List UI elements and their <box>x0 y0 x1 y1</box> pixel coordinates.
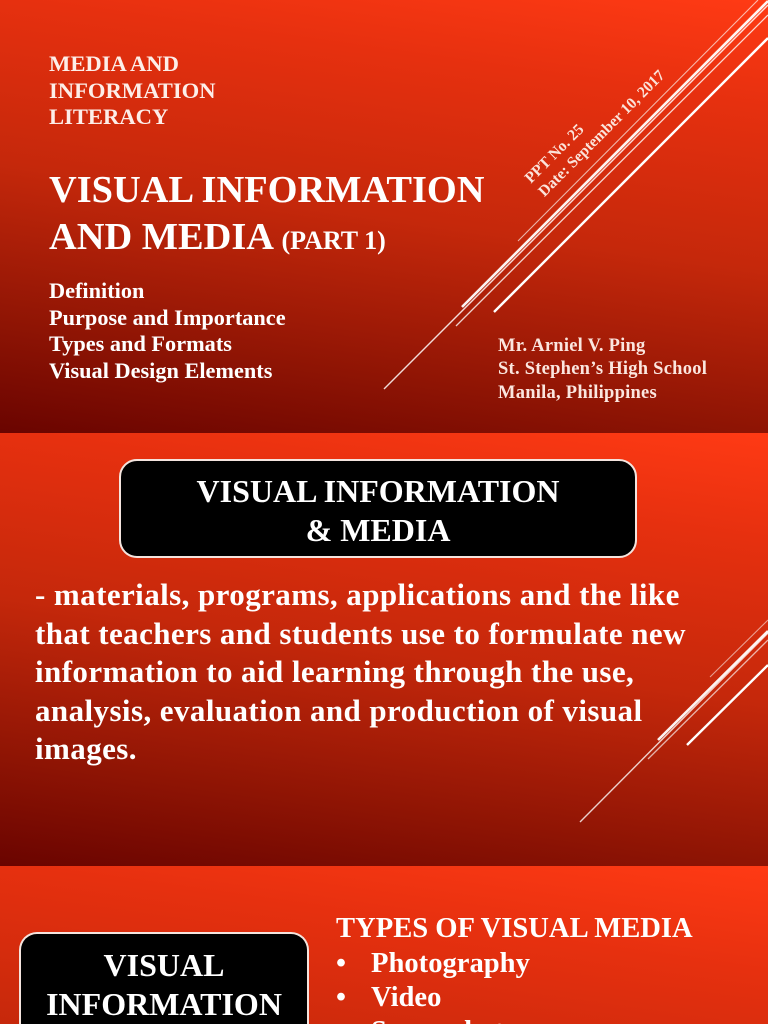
heading text: INFORMATION <box>46 986 282 1022</box>
text: definition paragraph: - materials, programs, applications and the like <box>35 577 680 612</box>
text: definition paragraph <box>35 577 686 766</box>
heading: types of visual media: TYPES OF VISUAL MEDIA <box>336 913 693 944</box>
text: author details: Mr. Arniel V. Ping <box>498 336 646 356</box>
text: contents list: Definition <box>49 278 144 303</box>
heading text: VISUAL <box>104 947 224 983</box>
heading: visual information and media <box>49 169 484 258</box>
text: subject heading: LITERACY <box>49 104 168 129</box>
text: contents list: Purpose and Importance <box>49 305 286 330</box>
text: subject heading <box>49 51 216 129</box>
list item: video: • <box>336 982 346 1013</box>
text: rotated PPT number and date: Date: September 10, 2017 <box>535 67 668 200</box>
heading text <box>196 473 560 548</box>
text: contents list: Visual Design Elements <box>49 358 272 383</box>
list item: photography: Photography <box>371 948 530 979</box>
panel: slide 3 types of visual media <box>0 866 768 1024</box>
heading text <box>46 947 282 1022</box>
heading text: & MEDIA <box>306 512 450 548</box>
text: definition paragraph: that teachers and students use to formulate new <box>35 616 686 650</box>
text: subject heading: INFORMATION <box>49 78 216 102</box>
text: author details: St. Stephen’s High School <box>498 359 707 379</box>
text: definition paragraph: images. <box>35 731 137 766</box>
heading: visual information and media: AND MEDIA (PART 1) <box>49 216 386 258</box>
heading text: VISUAL INFORMATION <box>196 473 560 509</box>
text: subject heading: MEDIA AND <box>49 51 179 76</box>
panel: slide 1 title slide <box>0 0 768 433</box>
text: contents list <box>49 278 286 383</box>
text: author details: Manila, Philippines <box>498 383 657 403</box>
list item: video: Video <box>371 982 441 1013</box>
text: definition paragraph: analysis, evaluation and production of visual <box>35 692 642 728</box>
text: definition paragraph: information to aid learning through the use, <box>35 654 634 689</box>
text: contents list: Types and Formats <box>49 331 232 356</box>
list: media types <box>336 948 530 1024</box>
heading: visual information and media: VISUAL INFORMATION <box>49 169 484 211</box>
text: rotated PPT number and date: PPT No. 25 <box>522 121 587 187</box>
decorative diagonal lines <box>384 0 768 390</box>
panel: slide 2 definition <box>0 433 768 866</box>
decorative diagonal lines <box>580 620 768 822</box>
text: author details <box>498 336 707 403</box>
callout box: visual information <box>19 932 309 1024</box>
list item: photography: • <box>336 948 346 979</box>
callout box: visual information and media <box>119 459 637 558</box>
list item: video <box>336 982 441 1013</box>
